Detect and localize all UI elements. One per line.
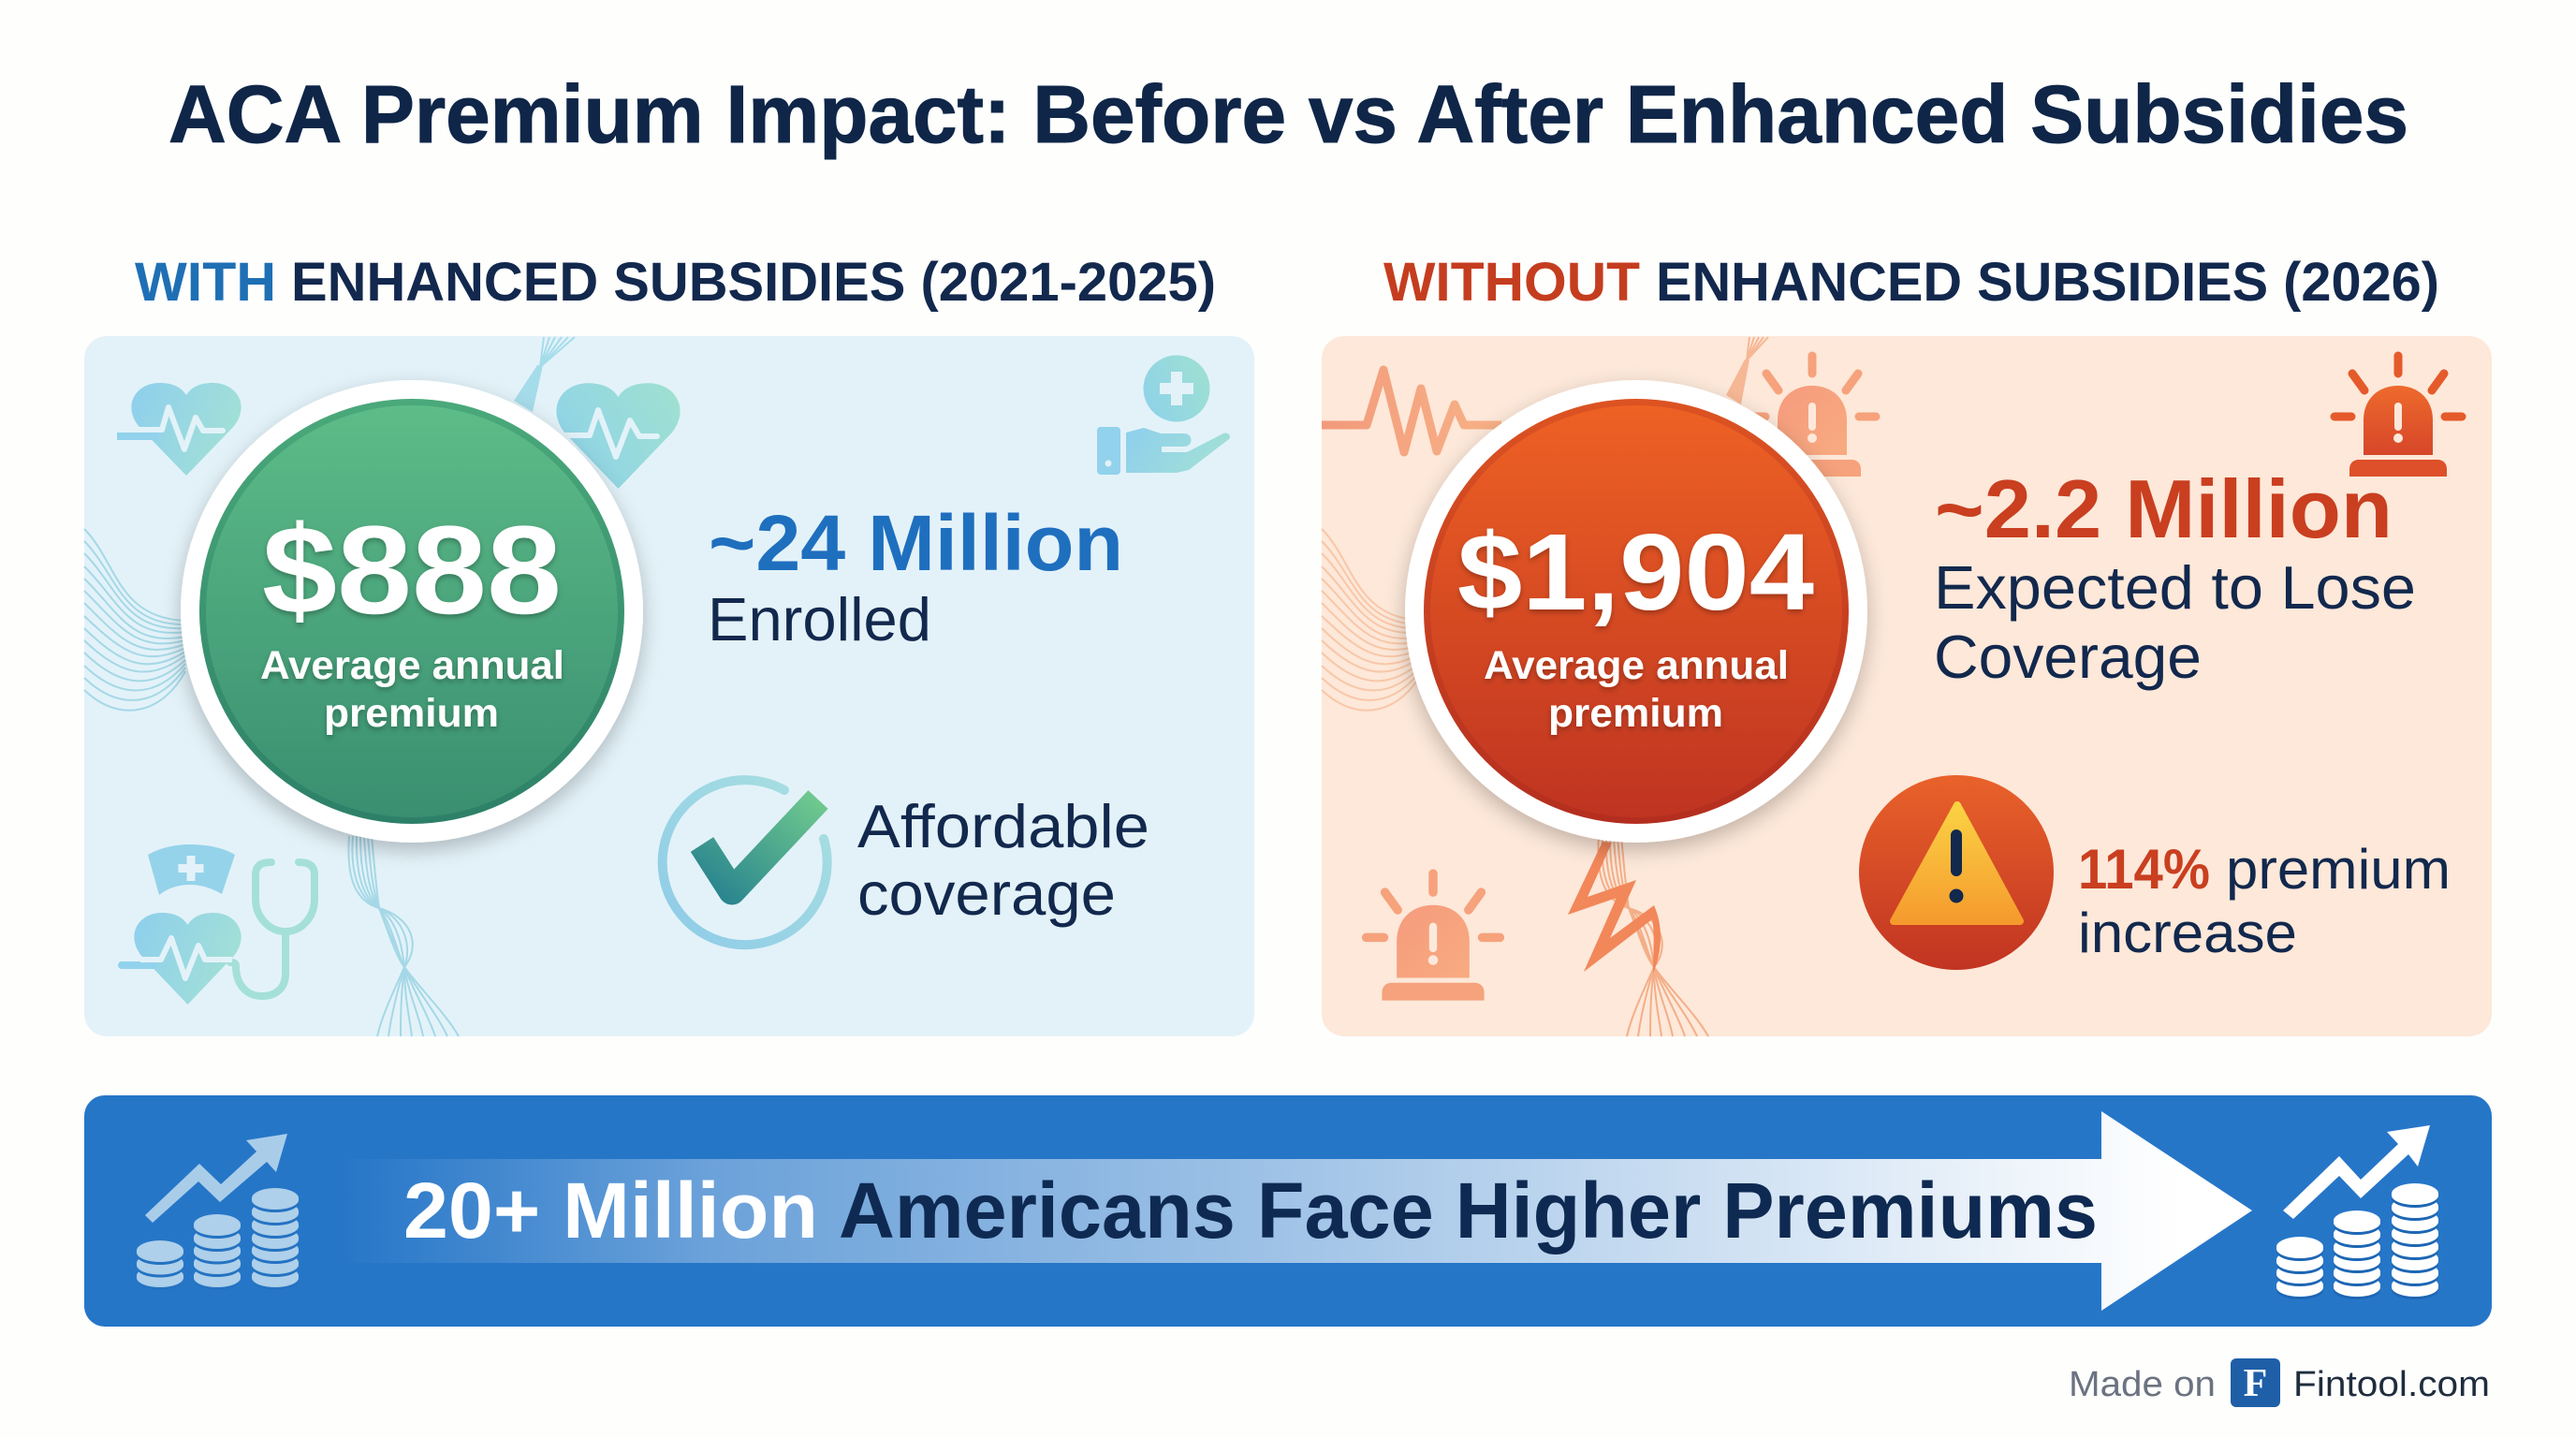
icon: heart with pulse, behind circle (556, 383, 681, 489)
icon: coins with rising arrow, left (137, 1134, 299, 1290)
stat: 24 million enrolled (708, 499, 1123, 653)
icon: heart with pulse, top left (117, 383, 242, 476)
value: $1,904: $1,904 (1457, 511, 1814, 633)
label: average annual premium (1484, 643, 1789, 736)
premium circle: $1,904 (1405, 380, 1867, 843)
premium circle: $888 (181, 380, 643, 843)
icon: alarm bottom left (1367, 873, 1500, 1001)
icon: alarm top right (2334, 356, 2462, 477)
text: affordable coverage: coverage (857, 859, 1116, 928)
stat: 2.2 million expected to lose coverage: Expected to Lose (1934, 553, 2416, 622)
stat: 2.2 million expected to lose coverage: ~2.2 Million (1935, 462, 2393, 555)
heading: with enhanced subsidies: ENHANCED SUBSIDIES (2021-2025) (291, 252, 1216, 313)
panel: without enhanced subsidies (1322, 336, 2492, 1036)
decorative waves: left panel (84, 337, 575, 1036)
title: ACA Premium Impact: Before vs After Enhanced Subsidies (168, 69, 2408, 160)
footer attribution: Made on (2069, 1365, 2216, 1404)
stat: 24 million enrolled: ~24 Million (709, 499, 1123, 587)
banner (84, 1095, 2492, 1327)
icon: warning triangle in circle (1859, 775, 2054, 970)
heading: with enhanced subsidies: WITH (135, 252, 276, 313)
logo: Fintool: F (2244, 1362, 2267, 1405)
icon: check mark in ring (663, 780, 827, 945)
text: 114% premium increase (2078, 838, 2451, 964)
icon: nurse cap (148, 844, 235, 895)
decorative waves: right panel left side (1322, 529, 1423, 711)
footer attribution (2069, 1358, 2490, 1407)
banner text: 20+ Million (403, 1167, 818, 1255)
logo: Fintool (2231, 1358, 2280, 1407)
footer attribution: Fintool.com (2293, 1365, 2490, 1404)
label: average annual premium (260, 643, 564, 736)
text: affordable coverage (857, 792, 1149, 928)
decorative waves: right panel top (1726, 337, 1768, 404)
stat: 24 million enrolled: Enrolled (708, 585, 931, 653)
label: average annual premium: premium (324, 691, 499, 736)
arrow: gradient to white (343, 1111, 2252, 1311)
text: affordable coverage: Affordable (857, 792, 1149, 860)
heading: without enhanced subsidies: WITHOUT (1383, 252, 1640, 313)
panel: with enhanced subsidies (84, 336, 1254, 1036)
icon: alarm behind circle (1749, 356, 1876, 477)
value: $888: $888 (262, 501, 562, 640)
icon: heart with pulse, bottom left (122, 913, 242, 1005)
decorative waves: right panel bottom (1598, 836, 1708, 1036)
stat: 2.2 million expected to lose coverage (1934, 462, 2416, 691)
panel background: without subsidies (1322, 336, 2492, 1036)
icon: caring hand with plus (1097, 356, 1230, 475)
banner text: Americans Face Higher Premiums (839, 1167, 2098, 1255)
panel background: with subsidies (84, 336, 1254, 1036)
icon: erratic pulse line (1322, 370, 1501, 452)
label: average annual premium: premium (1548, 691, 1723, 736)
text: 114% premium increase: premium (2226, 838, 2451, 901)
stat: 2.2 million expected to lose coverage: Coverage (1934, 623, 2202, 691)
icon: coins with rising arrow, right (2276, 1125, 2438, 1299)
label: average annual premium: Average annual (260, 643, 564, 688)
text: 114% premium increase: 114% (2078, 838, 2210, 901)
icon: lightning bolt (1568, 842, 1661, 974)
text: 114% premium increase: increase (2078, 902, 2297, 964)
label: average annual premium: Average annual (1484, 643, 1789, 688)
heading: without enhanced subsidies: ENHANCED SUBSIDIES (2026) (1656, 252, 2439, 313)
icon: stethoscope (230, 862, 315, 996)
banner background (84, 1095, 2492, 1327)
